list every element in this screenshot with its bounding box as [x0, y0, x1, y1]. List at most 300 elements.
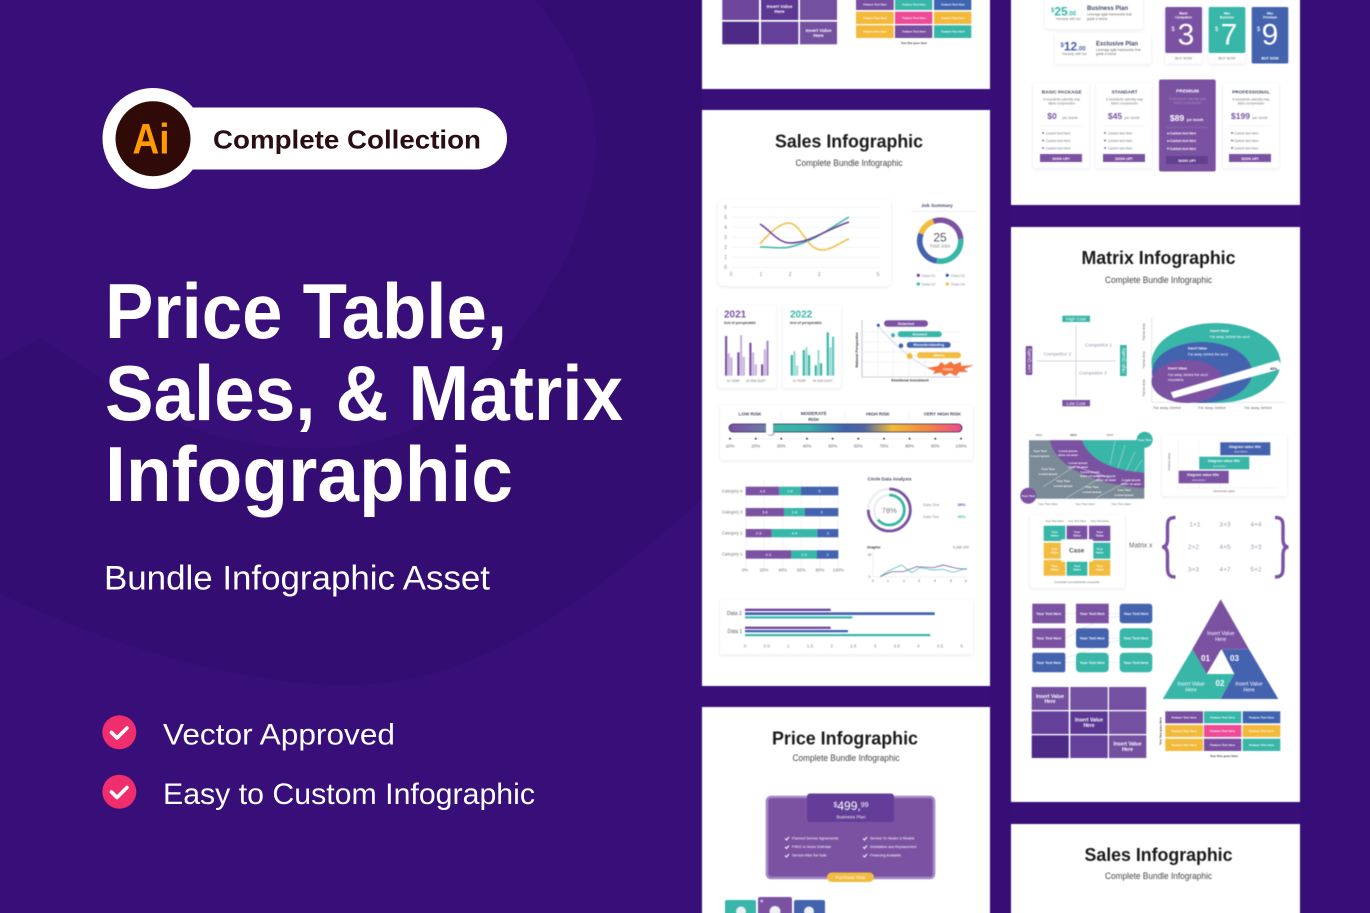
- stacked bar chart: Category 4: [722, 488, 743, 494]
- stacked bar chart: 2.4: [801, 552, 808, 557]
- nested ellipse chart: Theme Area: [1142, 323, 1146, 341]
- job summary donut: Data 04: [951, 282, 966, 286]
- risk scale: 60%: [854, 444, 863, 448]
- quadrant timeline chart: Emotional Investment: [891, 378, 929, 382]
- business plan price card: Business Plan: [836, 814, 866, 820]
- job summary donut: [911, 203, 977, 286]
- risk scale: 10%: [726, 444, 734, 448]
- graphic mini line chart: 6: [965, 579, 967, 583]
- segmented arc matrix: Your Text Here: [1111, 502, 1131, 506]
- feature colour grid: Feature Text Here: [1210, 729, 1235, 733]
- flow boxes: Your Text Here: [1080, 661, 1105, 665]
- number matrix with braces: 1+1: [1189, 522, 1201, 528]
- horizontal bar chart: 1: [787, 644, 790, 648]
- stacked bar chart: 5: [818, 488, 821, 494]
- horizontal bar chart: Data 1: [728, 629, 742, 635]
- quadrant matrix: High Cost: [1066, 317, 1087, 322]
- feature: Vector Approved: Vector Approved: [163, 718, 395, 752]
- flow boxes: Your Text Here: [1123, 612, 1149, 616]
- line chart: [718, 199, 891, 286]
- purple value grid: Here: [1044, 699, 1056, 705]
- badge label: Complete Collection: [213, 124, 481, 154]
- number price cards: Basic: [1179, 12, 1188, 16]
- panel: matrix infographic top crop: [702, 0, 990, 89]
- feature colour grid: Text One goes Here: [901, 41, 927, 45]
- quadrant timeline chart: Rational Perspective: [855, 332, 859, 368]
- flow boxes: Your Text Here: [1123, 661, 1149, 665]
- panel heading: Matrix Infographic: [1082, 248, 1236, 268]
- diagram value staircase chart: [1162, 435, 1287, 496]
- icon: Adobe Illustrator: [116, 101, 190, 176]
- segmented arc matrix: Your Text Here: [1075, 502, 1095, 506]
- number price cards: 3: [1178, 18, 1194, 52]
- nested ellipse chart: Far away, behind the word: [1168, 373, 1208, 377]
- circle data analysis: 78%: [882, 506, 897, 515]
- line chart: 3: [818, 272, 821, 278]
- horizontal bar chart: 4: [917, 644, 920, 648]
- business plan price card: Installation and Replacement: [870, 845, 916, 849]
- nested ellipse chart: [1142, 318, 1285, 410]
- stacked bar chart: 80%: [816, 568, 824, 572]
- plan: premium: Custom text Here: [1170, 139, 1196, 143]
- stacked bar chart: 60%: [797, 568, 806, 572]
- circle data analysis: 45%: [958, 514, 966, 519]
- segmented arc matrix: [1020, 432, 1153, 506]
- graphic mini line chart: 0: [869, 575, 871, 579]
- case matrix: Value: [1051, 568, 1059, 572]
- nested ellipse chart: 40%: [1270, 367, 1278, 371]
- feature colour grid: Feature Text Here: [902, 30, 926, 34]
- quadrant matrix: Competitor 3: [1079, 370, 1107, 376]
- plan: basic package: It excedents calendly may: [1043, 98, 1080, 102]
- line chart: 3: [724, 235, 727, 241]
- segmented arc matrix: Lorem ipsum: [1081, 470, 1100, 474]
- case matrix: Value: [1096, 568, 1104, 572]
- feature colour grid: Text Two goes Here: [1158, 717, 1162, 745]
- purple value grid: Here: [1083, 723, 1095, 729]
- nested ellipse chart: Far away, behind: [1153, 406, 1181, 410]
- business plan price card: Service To Heater & Models: [870, 836, 915, 840]
- segmented arc matrix: Your Text: [1022, 494, 1035, 498]
- case matrix: Your: [1074, 564, 1081, 568]
- job summary donut: 25: [933, 230, 947, 244]
- segmented arc matrix: MED: [1070, 433, 1078, 437]
- feature colour grid: Feature Text Here: [1210, 743, 1235, 747]
- case matrix: Your Text Here: [1045, 519, 1064, 523]
- plan: professional: PROFESSIONAL: [1232, 90, 1270, 96]
- plan: standart: SIGN UP!: [1115, 156, 1133, 161]
- flow boxes: Your Text Here: [1036, 661, 1061, 665]
- circle data analysis: Circle Data Analysis: [868, 476, 912, 482]
- job summary donut: Data 01: [922, 273, 936, 278]
- quadrant timeline chart: [855, 320, 974, 382]
- job summary donut: Data 02: [922, 282, 936, 286]
- bar chart 2022: [783, 305, 841, 388]
- business plan row: [1045, 0, 1143, 29]
- plan: basic package: Custom text Here: [1046, 132, 1071, 136]
- risk scale: 100%: [955, 444, 967, 448]
- exclusive plan row: 12: [1064, 40, 1078, 54]
- risk scale: VERY HIGH RISK: [924, 412, 962, 416]
- plan: standart: Custom text Here: [1108, 146, 1133, 150]
- line chart: 2: [789, 272, 792, 278]
- plan: premium: Custom text Here: [1170, 132, 1196, 136]
- plan: premium: $89: [1170, 113, 1184, 123]
- feature colour grid: Text One goes Here: [1210, 754, 1238, 758]
- purple value grid: [1032, 687, 1146, 758]
- panel heading: Sales Infographic: [1084, 845, 1232, 865]
- segmented arc matrix: dolor sit amet: [1121, 482, 1141, 486]
- flow boxes: Your Text Here: [1036, 636, 1061, 640]
- segmented arc matrix: Lorem ipsum: [1069, 461, 1088, 465]
- case matrix: Value: [1051, 534, 1059, 538]
- triangle diagram: 03: [1230, 654, 1239, 663]
- number price cards: BUY NOW: [1175, 56, 1193, 60]
- exclusive plan row: Exclusive Plan: [1096, 42, 1138, 48]
- case matrix: Value: [1096, 550, 1104, 554]
- risk scale: [720, 405, 973, 460]
- main title: Infographic: [105, 430, 513, 518]
- risk scale: 70%: [880, 444, 888, 448]
- nested ellipse chart: Far away, behind the word: [1210, 335, 1250, 339]
- case matrix: Case: [1069, 548, 1085, 555]
- risk scale: RISK: [808, 417, 820, 422]
- feature colour grid: Feature Text Here: [863, 16, 887, 20]
- number price cards: [1165, 7, 1288, 64]
- number matrix with braces: 2+2: [1188, 544, 1199, 551]
- graphic mini line chart: 2: [903, 579, 905, 583]
- purple value grid: Insert Value: [1075, 718, 1103, 724]
- horizontal bar chart: 1.5: [807, 644, 814, 648]
- number price cards: Computers: [1175, 16, 1192, 20]
- triangle diagram: Insert Value: [1235, 682, 1263, 688]
- risk scale: 30%: [777, 444, 786, 448]
- feature colour grid: [1158, 711, 1280, 758]
- feature colour grid: Feature Text Here: [902, 2, 926, 6]
- case matrix: Your: [1096, 547, 1104, 551]
- line chart: 1: [724, 255, 727, 261]
- plan: professional: It excedents calendly may: [1233, 98, 1270, 102]
- business plan price card: $: [833, 802, 837, 809]
- risk scale: 40%: [803, 444, 811, 448]
- diagram value staircase chart: Diagram value title: [1208, 459, 1240, 463]
- horizontal bar chart: 3.5: [894, 644, 900, 648]
- bar chart 2022: IA VEB DUST: [813, 379, 833, 383]
- case matrix: Value: [1051, 550, 1059, 554]
- nested ellipse chart: Theme Area: [1142, 351, 1146, 369]
- case matrix: Your: [1051, 530, 1059, 534]
- quadrant matrix: Low Quality: [1027, 348, 1032, 373]
- number price cards: 7: [1221, 18, 1237, 52]
- number matrix with braces: Matrix x: [1129, 540, 1153, 550]
- segmented arc matrix: Your Text: [1033, 449, 1047, 453]
- number matrix with braces: 3+3: [1250, 544, 1262, 551]
- case matrix: Consultant commits/better proposals: [1054, 580, 1100, 584]
- plan: professional: Custom text Here: [1234, 146, 1259, 150]
- stacked bar chart: 100%: [833, 568, 844, 572]
- main title: [105, 267, 623, 518]
- circle data analysis: [868, 476, 966, 531]
- stacked bar chart: 3: [820, 510, 823, 515]
- flow boxes: Your Text Here: [1080, 636, 1105, 640]
- segmented arc matrix: dolor sit amet: [1068, 465, 1088, 469]
- segmented arc matrix: Lorem ipsum: [1031, 454, 1050, 458]
- risk scale: 50%: [828, 444, 837, 448]
- plan: basic package: fabric ccorpression: [1048, 102, 1075, 106]
- bar chart 2021: IA VEB DUST: [746, 379, 766, 383]
- triangle diagram: Insert Value: [1207, 631, 1234, 637]
- plan: premium: SIGN UP!: [1178, 158, 1196, 163]
- purple value grid: Insert Value: [767, 4, 793, 9]
- business plan price card: Planned Service Agreements: [792, 836, 839, 840]
- nested ellipse chart: Insert Value: [1188, 346, 1207, 350]
- purple value grid: Here: [813, 33, 824, 38]
- case matrix: Value: [1073, 534, 1081, 538]
- number matrix with braces: 4+5: [1219, 544, 1231, 551]
- stacked bar chart: Category 2: [722, 531, 743, 536]
- quadrant matrix: Competitor 2: [1044, 352, 1072, 358]
- case matrix: Value: [1073, 568, 1081, 572]
- segmented arc matrix: Lorem ipsum: [1122, 478, 1141, 482]
- feature colour grid: Feature Text Here: [1210, 716, 1235, 720]
- segmented arc matrix: Your Text: [1117, 488, 1131, 492]
- panel: Matrix Infographic: [1011, 227, 1300, 802]
- stacked bar chart: 2.5: [756, 531, 762, 536]
- number matrix with braces: 5+2: [1250, 566, 1262, 574]
- stacked bar chart: 4.6: [760, 488, 766, 494]
- number price cards: Max: [1267, 12, 1273, 16]
- segmented arc matrix: MED: [1036, 433, 1043, 437]
- feature colour grid: Feature Text Here: [941, 2, 965, 6]
- stacked bar chart: Category 1: [722, 552, 743, 557]
- stacked bar chart: Category 3: [722, 510, 743, 515]
- flow boxes: Your Text Here: [1080, 612, 1105, 616]
- feature colour grid: Feature Text Here: [1171, 729, 1197, 733]
- quadrant matrix: [1026, 316, 1127, 406]
- bar chart 2021: IU TEMP: [727, 379, 740, 383]
- nested ellipse chart: mountains: [1168, 378, 1184, 382]
- plan: professional: $199: [1231, 111, 1250, 121]
- plan: basic package: BASIC PACKAGE: [1042, 90, 1082, 96]
- plan: professional: Custom text Here: [1234, 139, 1259, 143]
- feature colour grid: Feature Text Here: [863, 2, 887, 6]
- main title: Sales, & Matrix: [105, 349, 623, 437]
- diagram value staircase chart: Diagram value title: [1229, 445, 1261, 449]
- plan: basic package: per month: [1062, 116, 1078, 120]
- plan: professional: per month: [1252, 116, 1268, 120]
- panel subheading: Complete Bundle Infographic: [792, 753, 900, 763]
- number matrix with braces: 3+3: [1219, 522, 1231, 528]
- feature: Vector Approved: [102, 715, 395, 752]
- stacked bar chart: 2: [827, 531, 830, 536]
- business plan row: $: [1051, 8, 1055, 14]
- segmented arc matrix: Lorem ipsum: [1039, 472, 1058, 476]
- quadrant matrix: High Quality: [1121, 347, 1126, 373]
- plan: professional: Custom text Here: [1234, 132, 1259, 136]
- panel: pricing plans top crop: [1011, 0, 1300, 205]
- segmented arc matrix: Lorem ipsum: [1059, 449, 1078, 453]
- plan: premium: It excedents calendly may: [1169, 97, 1206, 101]
- job summary donut: Job Summary: [921, 203, 953, 209]
- triangle diagram: 02: [1216, 679, 1225, 688]
- risk scale: HIGH RISK: [866, 412, 891, 416]
- plan: professional: fabric ccorpression: [1238, 102, 1265, 106]
- plan: standart: Custom text Here: [1108, 132, 1133, 136]
- purple value grid: Insert Value: [1113, 742, 1142, 748]
- diagram value staircase chart: Vertical value: [1167, 453, 1171, 471]
- business plan row: .00: [1068, 12, 1077, 18]
- number matrix with braces: 4+4: [1250, 522, 1262, 528]
- feature colour grid: Feature Text Here: [941, 16, 965, 20]
- stacked bar chart: 4.3: [766, 552, 772, 557]
- plan: basic package: $0: [1047, 111, 1057, 121]
- plan: professional: [1223, 83, 1279, 168]
- number price cards: $: [1257, 27, 1261, 33]
- flow boxes: Your Text Here: [1036, 612, 1061, 616]
- graphic mini line chart: 5: [950, 579, 952, 583]
- business plan row: Business Plan: [1087, 6, 1128, 12]
- line chart: 1: [760, 272, 763, 278]
- horizontal bar chart: 4.5: [937, 644, 944, 648]
- quadrant timeline chart: Detached: [898, 322, 914, 326]
- bar chart 2022: 2022: [790, 310, 813, 320]
- segmented arc matrix: Lorem ipsum: [1115, 493, 1134, 497]
- nested ellipse chart: Far away, behind: [1198, 406, 1226, 410]
- plan: standart: [1096, 83, 1152, 168]
- segmented arc matrix: dolor sit amet: [1080, 474, 1100, 478]
- panel subheading: Complete Bundle Infographic: [796, 158, 903, 168]
- horizontal bar chart: [720, 600, 973, 654]
- segmented arc matrix: dolor sit amet: [1096, 478, 1116, 482]
- business plan row: Leverage agile frameworks that: [1087, 12, 1132, 16]
- purple value grid: [722, 0, 837, 44]
- plan: premium: [1159, 80, 1216, 172]
- plan: standart: It excedents calendly may: [1106, 98, 1143, 102]
- graphic mini line chart: 4: [934, 579, 936, 583]
- segmented arc matrix: Your Text: [1085, 485, 1099, 489]
- graphic mini line chart: [867, 546, 969, 583]
- stacked bar chart: 20%: [760, 568, 768, 572]
- segmented arc matrix: Your Text: [1138, 438, 1151, 442]
- horizontal bar chart: 0.5: [764, 644, 770, 648]
- diagram value staircase chart: Horizontal value: [1213, 489, 1235, 493]
- panel heading: Sales Infographic: [775, 132, 923, 152]
- circle data analysis: 39%: [958, 502, 966, 507]
- bar chart 2021: [718, 305, 776, 388]
- feature: Easy to Custom Infographic: Easy to Custom Infographic: [163, 778, 535, 811]
- bar chart 2022: text of perspiciatis: [790, 321, 822, 325]
- triangle diagram: Here: [1215, 637, 1226, 643]
- plan: premium: fabric ccorpression: [1174, 101, 1201, 105]
- exclusive plan row: Hensely with tax: [1062, 52, 1087, 56]
- nested ellipse chart: Far away, behind the word: [1188, 352, 1228, 356]
- plan: basic package: SIGN UP!: [1052, 156, 1070, 161]
- purchase button: Purchase Now: [836, 875, 866, 880]
- segmented arc matrix: MAN: [1107, 433, 1113, 437]
- business plan row: 25: [1054, 4, 1068, 18]
- triangle diagram: Here: [1243, 688, 1255, 694]
- feature colour grid: Feature Text Here: [1249, 716, 1274, 720]
- quadrant timeline chart: Misunderstanding: [913, 343, 944, 347]
- exclusive plan row: $: [1060, 43, 1064, 49]
- line chart: 0: [730, 272, 733, 278]
- segmented arc matrix: Lorem ipsum: [1097, 474, 1116, 478]
- horizontal bar chart: 5: [960, 644, 963, 648]
- stacked bar chart: [722, 480, 844, 572]
- quadrant timeline chart: Aroused: [912, 332, 927, 336]
- graphic mini line chart: Graphic: [867, 546, 881, 550]
- number matrix with braces: 3+3: [1188, 566, 1199, 574]
- triangle diagram: Insert Value: [1177, 682, 1205, 688]
- feature colour grid: Feature Text Here: [941, 30, 965, 34]
- plan: standart: per month: [1124, 116, 1140, 120]
- exclusive plan row: guide a robust: [1096, 52, 1116, 56]
- bar chart 2021: text of perspiciatis: [724, 321, 756, 325]
- circle data analysis: Data One: [923, 503, 939, 507]
- bar chart 2021: 2021: [724, 310, 747, 320]
- plan: professional: SIGN UP!: [1241, 156, 1259, 161]
- purchase button: [827, 872, 874, 882]
- number matrix with braces: [1129, 518, 1288, 577]
- nested ellipse chart: Insert Value: [1210, 329, 1229, 333]
- graphic mini line chart: 1: [887, 579, 889, 583]
- diagram value staircase chart: description: [1234, 450, 1248, 454]
- exclusive plan row: [1055, 33, 1151, 64]
- quadrant matrix: Competitor 1: [1085, 342, 1113, 348]
- number price cards: $: [1171, 27, 1175, 33]
- quadrant timeline chart: Crisis: [943, 368, 953, 372]
- horizontal bar chart: Data 2: [727, 611, 742, 617]
- segmented arc matrix: Your Text: [1056, 479, 1070, 483]
- stacked bar chart: 4.4: [792, 531, 798, 536]
- exclusive plan row: Leverage agile frameworks that: [1096, 48, 1141, 52]
- icon: Adobe Illustrator: Ai: [132, 116, 170, 164]
- purple value grid: Here: [1122, 747, 1133, 753]
- case matrix: Your: [1074, 530, 1081, 534]
- panel: Price Infographic: [702, 707, 990, 913]
- subtitle: Bundle Infographic Asset: [104, 560, 491, 598]
- feature colour grid: Feature Text Here: [1171, 716, 1197, 720]
- business plan price card: 99: [861, 802, 869, 809]
- graphic mini line chart: 0: [872, 579, 874, 583]
- stacked bar chart: 2.8: [787, 488, 794, 494]
- stacked bar chart: 2: [827, 552, 830, 557]
- case matrix: Your: [1096, 530, 1104, 534]
- feature colour grid: Feature Text Here: [902, 16, 926, 20]
- job summary donut: Data 03: [951, 273, 966, 278]
- number price cards: Premium: [1263, 16, 1277, 20]
- line chart: 5: [724, 215, 727, 221]
- feature colour grid: Feature Text Here: [1171, 743, 1197, 747]
- horizontal bar chart: 3: [874, 644, 877, 648]
- number matrix with braces: 4+7: [1219, 566, 1231, 574]
- plan: premium: Custom text Here: [1170, 147, 1196, 151]
- plan: standart: Custom text Here: [1108, 139, 1133, 143]
- diagram value staircase chart: description: [1192, 478, 1206, 482]
- nested ellipse chart: Insert Value: [1168, 366, 1187, 370]
- flow boxes: [1032, 604, 1152, 672]
- business plan price card: FREE In Home Estimate: [792, 845, 831, 849]
- graphic mini line chart: 30: [868, 553, 871, 557]
- horizontal bar chart: 2.5: [850, 644, 857, 648]
- risk scale: LOW RISK: [739, 412, 762, 416]
- plan: premium: PREMIUM: [1176, 88, 1199, 94]
- graphic mini line chart: 3: [918, 579, 920, 583]
- segmented arc matrix: Your Text: [1041, 467, 1055, 471]
- line chart: 4: [724, 225, 727, 231]
- line chart: 0: [724, 265, 727, 271]
- purple value grid: Insert Value: [1036, 694, 1064, 700]
